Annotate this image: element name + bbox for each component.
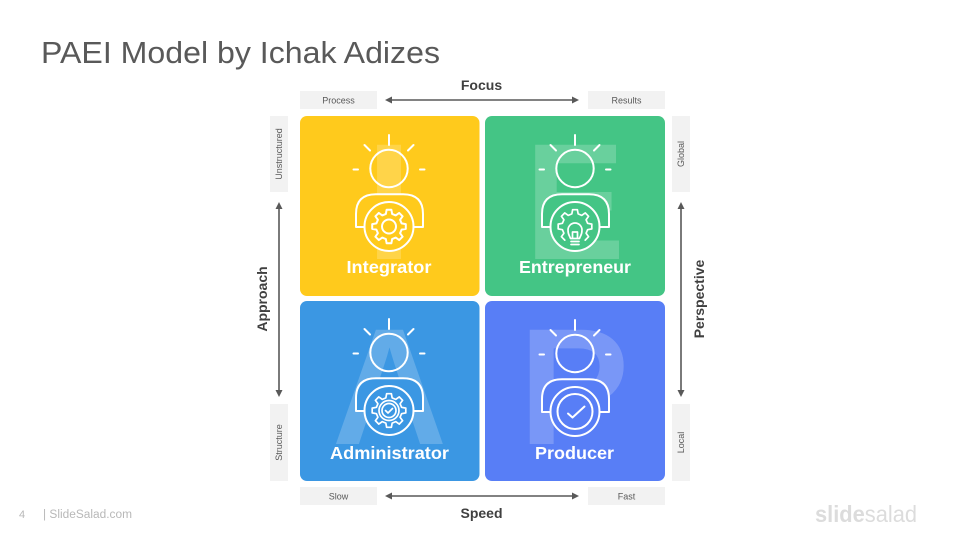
heading: focus: Focus: [461, 77, 502, 93]
heading: perspective: Perspective: [691, 259, 707, 338]
label: results: [588, 91, 665, 109]
label: fast: [588, 487, 665, 505]
label: process: Process: [322, 96, 355, 106]
panel: producer: [485, 295, 665, 481]
watermark letter E: E: [525, 110, 625, 295]
panel: entrepreneur: [485, 110, 665, 296]
label: entrepreneur: Entrepreneur: [519, 257, 631, 277]
label: process: [300, 91, 377, 109]
logo: slidesalad wordmark: slidesalad: [815, 501, 917, 527]
axis: speed: [300, 487, 665, 521]
label: fast: Fast: [618, 492, 636, 502]
heading: speed: Speed: [460, 505, 503, 521]
watermark letter I: I: [366, 110, 412, 295]
label: results: Results: [611, 96, 642, 106]
icon: person with check badge: [540, 320, 610, 436]
label: slow: Slow: [329, 492, 349, 502]
label: integrator: Integrator: [346, 257, 432, 277]
label: unstructured: Unstructured: [274, 128, 284, 180]
label: global: Global: [676, 141, 686, 167]
label: local: Local: [676, 432, 686, 453]
label: structure: [270, 404, 288, 481]
axis: perspective: [672, 116, 707, 481]
label: slow: [300, 487, 377, 505]
arrow: focus: [385, 96, 579, 104]
panel: integrator: [300, 110, 480, 296]
watermark letter P: P: [519, 295, 629, 480]
label: producer: Producer: [535, 443, 614, 463]
arrow: speed: [385, 492, 579, 500]
label: global: [672, 116, 690, 192]
watermark letter A: A: [332, 295, 447, 480]
label: local: [672, 404, 690, 481]
footer: site name: | SlideSalad.com: [43, 509, 132, 521]
icon: person with gear and light bulb: [540, 135, 610, 251]
axis: focus: [300, 77, 665, 109]
icon: person with gear: [354, 135, 424, 251]
label: structure: Structure: [274, 424, 284, 461]
arrow: approach: [276, 202, 282, 397]
title: PAEI Model by Ichak Adizes: [41, 35, 440, 70]
icon: person with gear and check: [354, 319, 424, 435]
label: administrator: Administrator: [330, 443, 449, 463]
axis: approach: [254, 116, 288, 481]
arrow: perspective: [678, 202, 684, 397]
heading: approach: Approach: [254, 266, 270, 332]
panel: administrator: [300, 295, 480, 481]
label: unstructured: [270, 116, 288, 192]
footer: page number: 4: [19, 509, 25, 521]
